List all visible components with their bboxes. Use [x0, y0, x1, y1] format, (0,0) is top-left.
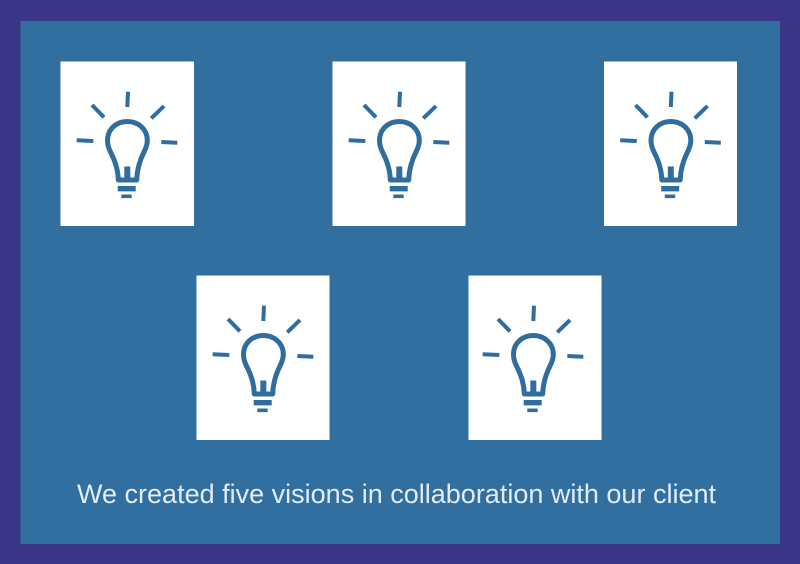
icon: light bulb 5 — [483, 306, 583, 410]
icon: light bulb 3 — [620, 92, 721, 196]
icon: light bulb 2 — [349, 92, 449, 196]
card: vision 3 — [604, 62, 737, 226]
card: vision 5 — [468, 276, 602, 440]
card: vision 2 — [332, 62, 466, 226]
icon: light bulb 4 — [213, 306, 313, 410]
icon: light bulb 1 — [77, 92, 177, 196]
caption: We created five visions in collaboration with our client — [77, 479, 716, 509]
card: vision 1 — [60, 62, 194, 226]
card: vision 4 — [196, 276, 330, 440]
